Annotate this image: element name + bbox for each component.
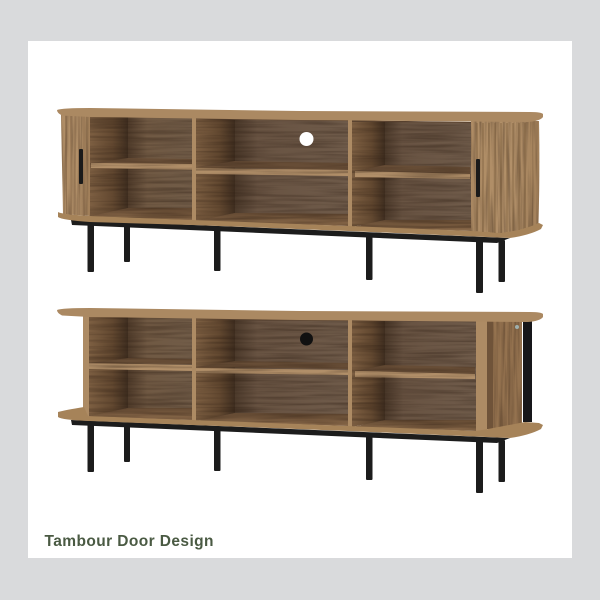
metal base frame and legs [71, 220, 510, 293]
cabinet: doors open [57, 308, 543, 493]
shelves [89, 358, 192, 364]
black door track [523, 321, 532, 422]
open shelving interior [89, 116, 472, 231]
white panel [28, 41, 572, 558]
bay floors [89, 408, 192, 420]
top panel [57, 308, 543, 322]
top panel [57, 108, 543, 122]
left tambour door [61, 115, 90, 216]
bottom panel [58, 212, 543, 238]
bottom panel [58, 407, 543, 438]
dividers [83, 316, 487, 431]
right tambour door [471, 121, 539, 233]
dividers [192, 117, 352, 227]
shelves [91, 158, 192, 164]
metal base frame and legs [71, 420, 510, 493]
cabinet: doors closed [57, 108, 543, 293]
bay floors [90, 208, 192, 220]
end panel with screw [487, 321, 522, 429]
caption: Tambour Door Design [44, 533, 214, 550]
cable hole [300, 132, 314, 146]
open shelving interior [89, 316, 476, 431]
cable hole [300, 332, 313, 346]
